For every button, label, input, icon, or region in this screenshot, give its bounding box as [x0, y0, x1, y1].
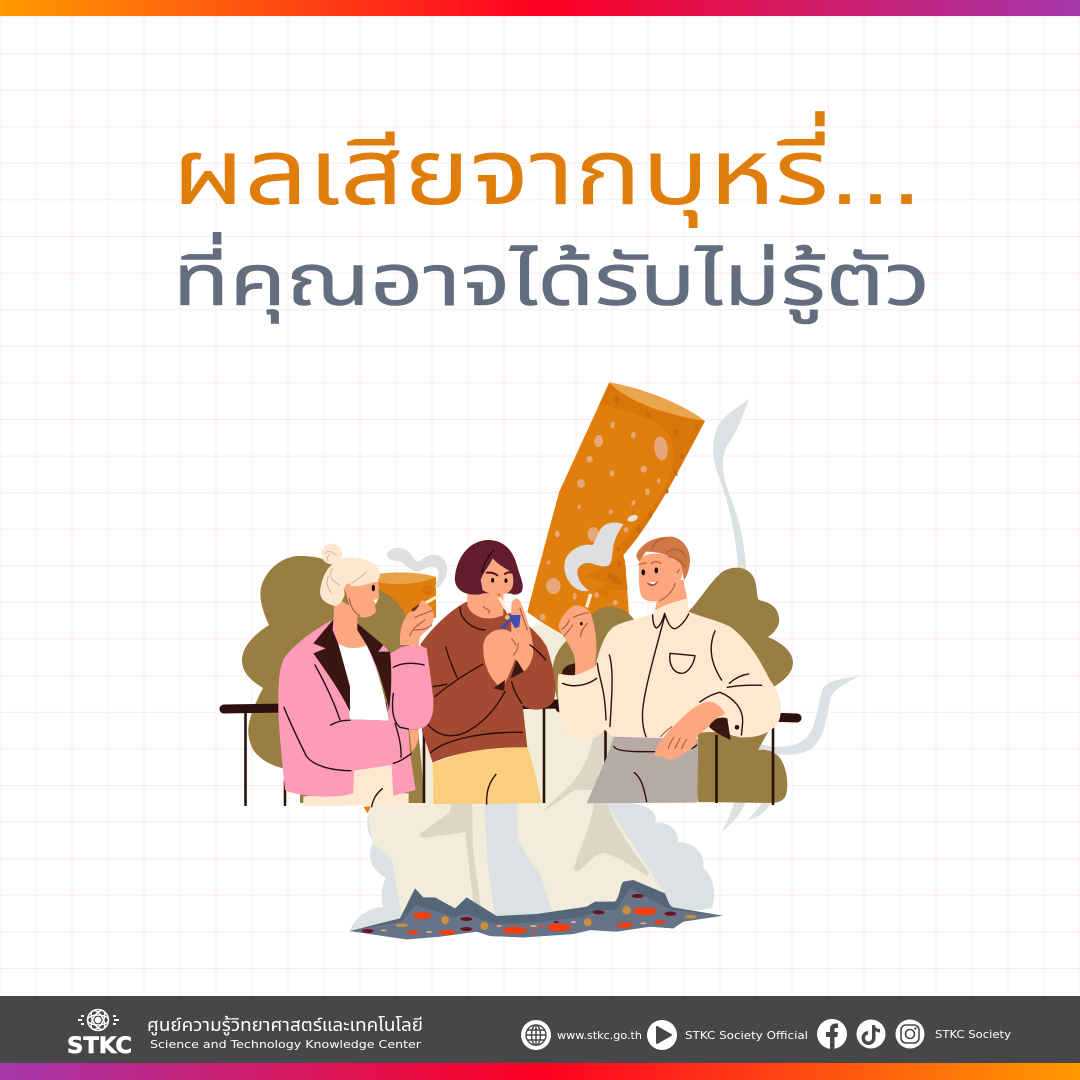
filter light top [609, 382, 705, 421]
top gradient bar [0, 0, 1080, 16]
embers: peach [381, 921, 647, 933]
shirt [338, 643, 389, 721]
bush: right [670, 568, 793, 740]
face [481, 558, 513, 595]
neck [655, 580, 688, 617]
filter spots [540, 422, 669, 621]
logo wordmark: STKC [67, 1034, 132, 1059]
bush: left [242, 556, 425, 803]
filter dark shards [580, 553, 628, 599]
smoke curl on filter [564, 523, 623, 591]
raised hand [558, 606, 596, 675]
icon: youtube play [647, 1020, 677, 1050]
website text: www.stkc.go.th [557, 1029, 642, 1042]
embers: ochre [396, 906, 697, 930]
dark cuff [709, 718, 731, 740]
ear [345, 584, 353, 597]
right hand [511, 599, 533, 672]
eye and smile [372, 585, 375, 591]
hair [320, 557, 380, 606]
instagram text: STKC Society [935, 1028, 1012, 1041]
hand [400, 600, 434, 647]
title line 2: ที่คุณอาจได้รับไม่รู้ตัว [173, 232, 930, 324]
organisation name English: Science and Technology Knowledge Center [150, 1038, 422, 1051]
paper shade: creases [420, 690, 649, 908]
cigarette [413, 595, 440, 610]
man cigarette [587, 594, 591, 607]
person: woman in pink jacket [278, 544, 440, 813]
trousers [433, 745, 542, 804]
ear [675, 566, 682, 580]
neck [467, 593, 503, 618]
resting arm [654, 702, 725, 760]
title line 1: ผลเสียจากบุหรี่... [172, 111, 922, 228]
ash pile [350, 880, 723, 939]
logo emblem [78, 1008, 119, 1032]
logo: STKC [67, 1008, 132, 1059]
jacket [278, 619, 433, 797]
person: man in cream shirt [558, 537, 781, 803]
organisation name Thai: ศูนย์ความรู้วิทยาศาสตร์และเทคโนโลยี [147, 1015, 423, 1037]
trousers [303, 763, 409, 806]
icon: facebook [817, 1019, 847, 1049]
icon: instagram [896, 1020, 924, 1048]
cigarette and flame [497, 594, 509, 613]
face [347, 582, 379, 617]
small smoke [387, 548, 447, 588]
orange tip [363, 807, 371, 813]
hair bun [321, 544, 342, 564]
brows and eyes [487, 572, 512, 575]
small cigarette behind woman [378, 548, 447, 618]
sweater [420, 602, 555, 763]
hair [455, 540, 523, 595]
head [639, 554, 683, 601]
eyes and brows [641, 569, 645, 575]
icon: website globe [521, 1020, 551, 1050]
youtube text: STKC Society Official [685, 1029, 808, 1042]
sweater lines [460, 607, 485, 630]
footer band [0, 996, 1080, 1063]
icon: tiktok [856, 1020, 886, 1048]
trousers [587, 736, 698, 803]
cigarette filter [527, 382, 705, 635]
filter body [527, 382, 705, 635]
trouser line [372, 789, 382, 807]
lines on shirt [642, 615, 665, 737]
railing [224, 704, 797, 806]
smoke: wisp right of cigarette [713, 399, 749, 570]
embers: red [407, 907, 665, 935]
filter dark dots [606, 396, 699, 586]
lapels [313, 619, 391, 712]
smoke: lower wisps [722, 675, 860, 832]
bottom gradient bar [0, 1063, 1080, 1080]
person: woman in brown sweater [420, 540, 555, 804]
bush: centre [552, 607, 650, 720]
left hand [483, 629, 517, 690]
illustration: smokers and giant cigarette [224, 382, 860, 939]
ash pile: lighter interior [350, 888, 723, 939]
lighter [498, 615, 521, 629]
mouth [647, 581, 658, 586]
collar [653, 598, 688, 629]
smoke: cloud around cigarette [350, 795, 714, 931]
embers: maroon [362, 894, 676, 933]
small skin strip [409, 730, 419, 752]
bush: right lower [690, 715, 787, 803]
shirt [558, 598, 781, 741]
jacket lines [315, 665, 340, 720]
cigarette paper [367, 614, 666, 916]
cuffs [493, 660, 524, 691]
ash pile: dark base [350, 880, 723, 939]
hair [636, 537, 690, 580]
paper gap showing smoke [484, 800, 553, 918]
hand lines [512, 608, 527, 655]
rolled sleeve [699, 692, 743, 736]
filter dark band [599, 382, 705, 555]
left cuff dark [562, 663, 575, 675]
neck [333, 597, 367, 648]
smoke puff on filter [627, 514, 639, 523]
